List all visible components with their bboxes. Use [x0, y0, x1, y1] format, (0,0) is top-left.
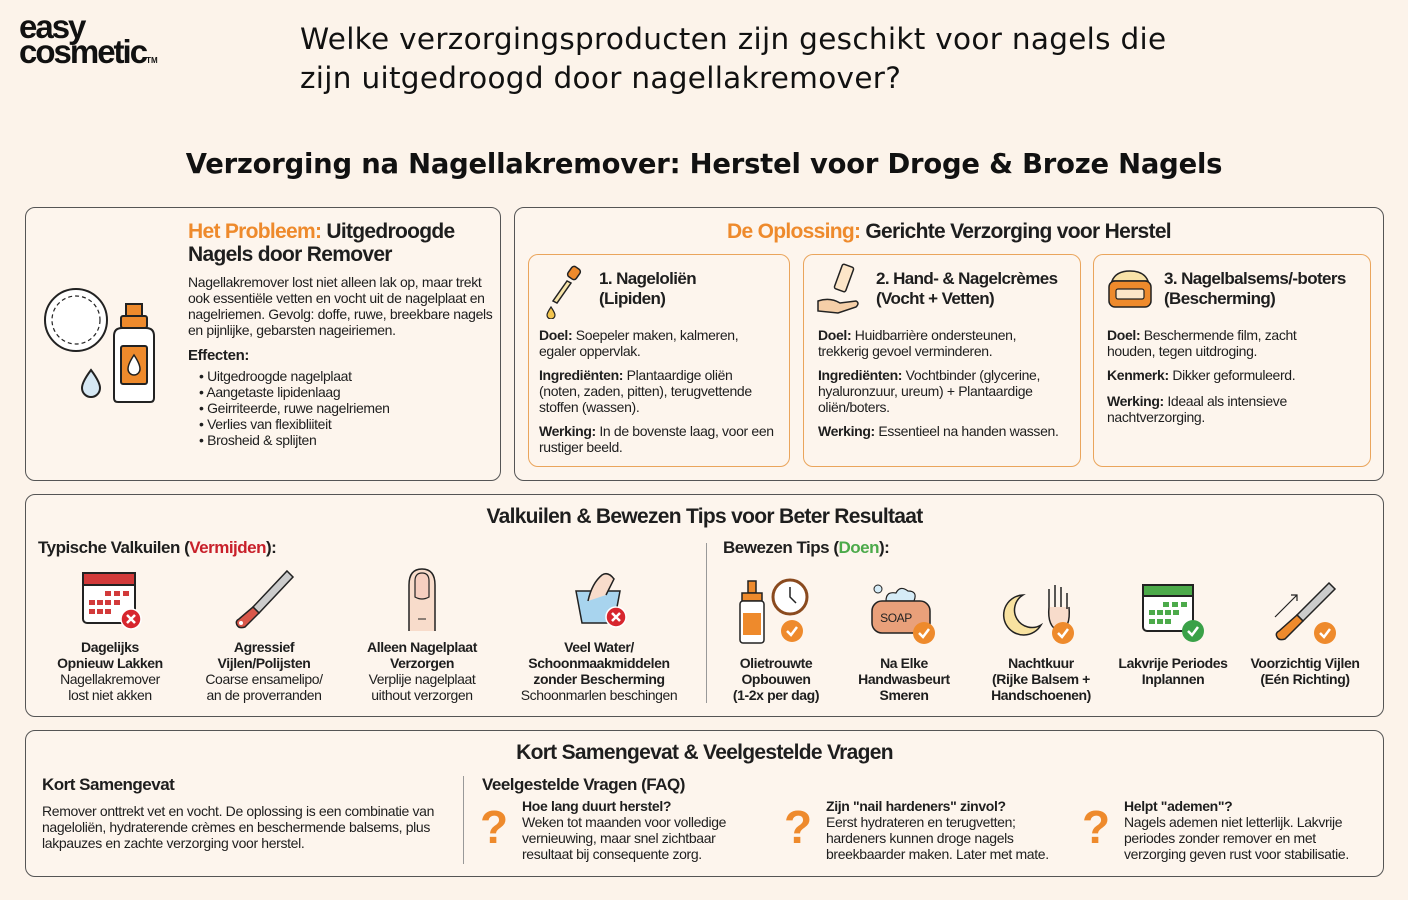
FAQ heading: Veelgestelde Vragen (FAQ) [482, 775, 685, 794]
icon: dropper [546, 266, 582, 319]
card: balms: (Bescherming) [1164, 289, 1275, 308]
pitfall: daily lacquer: Dagelijks [81, 639, 139, 655]
heading [188, 220, 454, 266]
faq 2: Eerst hydrateren en terugvetten; hardeners kunnen droge nagels breekbaarder maken. Later met mate. [826, 814, 1049, 862]
card: nail oils: 1. Nageloliën [599, 269, 696, 288]
faq 3: Helpt "ademen"? [1124, 798, 1232, 814]
tip: night treatment: Nachtkuur [1008, 655, 1074, 671]
pitfall: only nail plate: Alleen Nagelplaat [367, 639, 477, 655]
icon: balm jar [1108, 270, 1152, 308]
pitfall: daily lacquer [57, 572, 163, 703]
heading: De Oplossing: Gerichte Verzorging voor Herstel [727, 220, 1171, 243]
card: balms: Doel: Beschermende film, zacht houden, tegen uitdroging. Kenmerk: Dikker geformuleerd. Werking: Ideaal als intensieve nachtverzorging. [1107, 327, 1296, 425]
card: creams: Doel: Huidbarrière ondersteunen, trekkerig gevoel verminderen. Ingrediënten: Vochtbinder (glycerine, hyaluronzuur, ureum) + Plantaardige oliën/boters. Werking: Essentieel na handen wassen. [818, 327, 1058, 439]
tip: after handwash: Na Elke [880, 655, 928, 671]
summary: Remover onttrekt vet en vocht. De oplossing is een combinatie van nageloliën, hydraterende crèmes en beschermende balsems, plus lakpauzes en zachte verzorging voor herstel. [42, 803, 434, 851]
tip: oil routine [733, 578, 819, 703]
text block: Nagellakremover lost niet alleen lak op, maar trekt ook essentiële vetten en vocht uit de nagelplaat en nagelriemen. Gevolg: doffe, ruwe, breekbare nagels en pijnlijke, gebarsten nageiriemen. [188, 274, 492, 338]
pitfall: only nail plate: uithout verzorgen [371, 687, 473, 703]
pitfall: daily lacquer: lost niet akken [68, 687, 152, 703]
subheading: tips: Bewezen Tips (Doen): [723, 538, 889, 557]
logo [19, 8, 158, 70]
faq 1: ? [480, 801, 508, 853]
effects list [188, 347, 390, 448]
effects list: Verlies van flexibliiteit [207, 416, 331, 432]
card: creams [803, 254, 1081, 467]
effects list: Uitgedroogde nagelplaat [207, 368, 352, 384]
heading: Het Probleem: Uitgedroogde [188, 220, 454, 243]
panel: pitfalls and tips [25, 494, 1384, 717]
effects list: Brosheid & splijten [207, 432, 316, 448]
tip: after handwash: Handwasbeurt [858, 671, 950, 687]
tip: gentle filing: (Eén Richting) [1260, 671, 1350, 687]
pitfall: aggressive filing: Agressief [234, 639, 294, 655]
faq 2 [784, 798, 1049, 862]
tip: night treatment: (Rijke Balsem + [992, 671, 1090, 687]
tip: after handwash [858, 584, 950, 703]
effects list: Aangetaste lipidenlaag [206, 384, 340, 400]
logo: cosmeticTM [19, 33, 158, 70]
subheading: pitfalls: Typische Valkuilen (Vermijden): [38, 538, 276, 557]
pitfall: aggressive filing: an de proverranden [206, 687, 322, 703]
pitfall: aggressive filing [205, 570, 323, 703]
faq 3 [1082, 798, 1349, 862]
faq 3: Nagels ademen niet letterlijk. Lakvrije periodes zonder remover en met verzorging geven rust voor stabilisatie. [1124, 814, 1349, 862]
pitfall: aggressive filing: Coarse ensamelipo/ [205, 671, 323, 687]
tip: polish-free periods [1118, 584, 1228, 687]
tip: oil routine: Olietrouwte [740, 655, 812, 671]
title: zijn uitgedroogd door nagellakremover? [300, 61, 901, 95]
tip: polish-free periods: Inplannen [1142, 671, 1204, 687]
pitfall: water: Schoonmarlen beschingen [521, 687, 677, 703]
faq 2: ? [784, 801, 812, 853]
pitfall: daily lacquer: Nagellakremover [60, 671, 160, 687]
pitfall: only nail plate: Verplije nagelplaat [369, 671, 475, 687]
pitfall: aggressive filing: Vijlen/Polijsten [218, 655, 310, 671]
heading: Kort Samengevat & Veelgestelde Vragen [516, 741, 893, 764]
card: nail oils [528, 254, 790, 467]
tip: gentle filing: Voorzichtig Vijlen [1251, 655, 1359, 671]
card: creams: (Vocht + Vetten) [876, 289, 994, 308]
effects list: Geirriteerde, ruwe nagelriemen [207, 400, 390, 416]
card: balms [1093, 254, 1371, 467]
tip: after handwash: SOAP [880, 611, 912, 625]
tip: gentle filing [1250, 582, 1360, 687]
pitfall: only nail plate [367, 568, 478, 703]
faq 1 [480, 798, 726, 862]
pitfall: daily lacquer: Opnieuw Lakken [57, 655, 163, 671]
faq 3: ? [1082, 801, 1110, 853]
pitfall: water [521, 572, 677, 703]
pitfall: water: Veel Water/ [564, 639, 634, 655]
main heading: Verzorging na Nagellakremover: Herstel voor Droge & Broze Nagels [186, 149, 1222, 180]
tip: oil routine: (1-2x per dag) [733, 687, 819, 703]
card: nail oils: (Lipiden) [599, 289, 665, 308]
tip: after handwash: Smeren [880, 687, 928, 703]
panel: summary and FAQ [25, 730, 1384, 877]
pitfall: water: zonder Bescherming [533, 671, 665, 687]
faq 1: Hoe lang duurt herstel? [522, 798, 671, 814]
logo: easy [19, 8, 84, 45]
faq 2: Zijn "nail hardeners" zinvol? [826, 798, 1006, 814]
icon: cotton pad and remover bottle [44, 288, 155, 403]
heading: Valkuilen & Bewezen Tips voor Beter Resultaat [486, 505, 923, 528]
tip: oil routine: Opbouwen [741, 671, 811, 687]
faq 1: Weken tot maanden voor volledige vernieuwing, maar snel zichtbaar resultaat bij consequente zorg. [522, 814, 726, 862]
title: Welke verzorgingsproducten zijn geschikt voor nagels die [300, 22, 1166, 56]
summary [42, 775, 434, 851]
tip: night treatment [991, 585, 1091, 703]
icon: hand with tube [817, 264, 859, 314]
card: creams: 2. Hand- & Nagelcrèmes [876, 269, 1057, 288]
card: nail oils: Doel: Soepeler maken, kalmeren, egaler oppervlak. Ingrediënten: Plantaardige oliën (noten, zaden, pitten), terugvettende stoffen (wassen). Werking: In de bovenste laag, voor een rustiger beeld. [539, 327, 774, 455]
summary: Kort Samengevat [42, 775, 174, 794]
pitfall: only nail plate: Verzorgen [390, 655, 454, 671]
tip: polish-free periods: Lakvrije Periodes [1118, 655, 1228, 671]
title [300, 22, 1166, 95]
panel: solution [514, 207, 1384, 481]
pitfall: water: Schoonmaakmiddelen [528, 655, 670, 671]
heading: Nagels door Remover [188, 243, 392, 266]
effects list: Effecten: [188, 347, 249, 364]
tip: night treatment: Handschoenen) [991, 687, 1091, 703]
card: balms: 3. Nagelbalsems/-boters [1164, 269, 1346, 288]
panel: problem [25, 207, 501, 481]
